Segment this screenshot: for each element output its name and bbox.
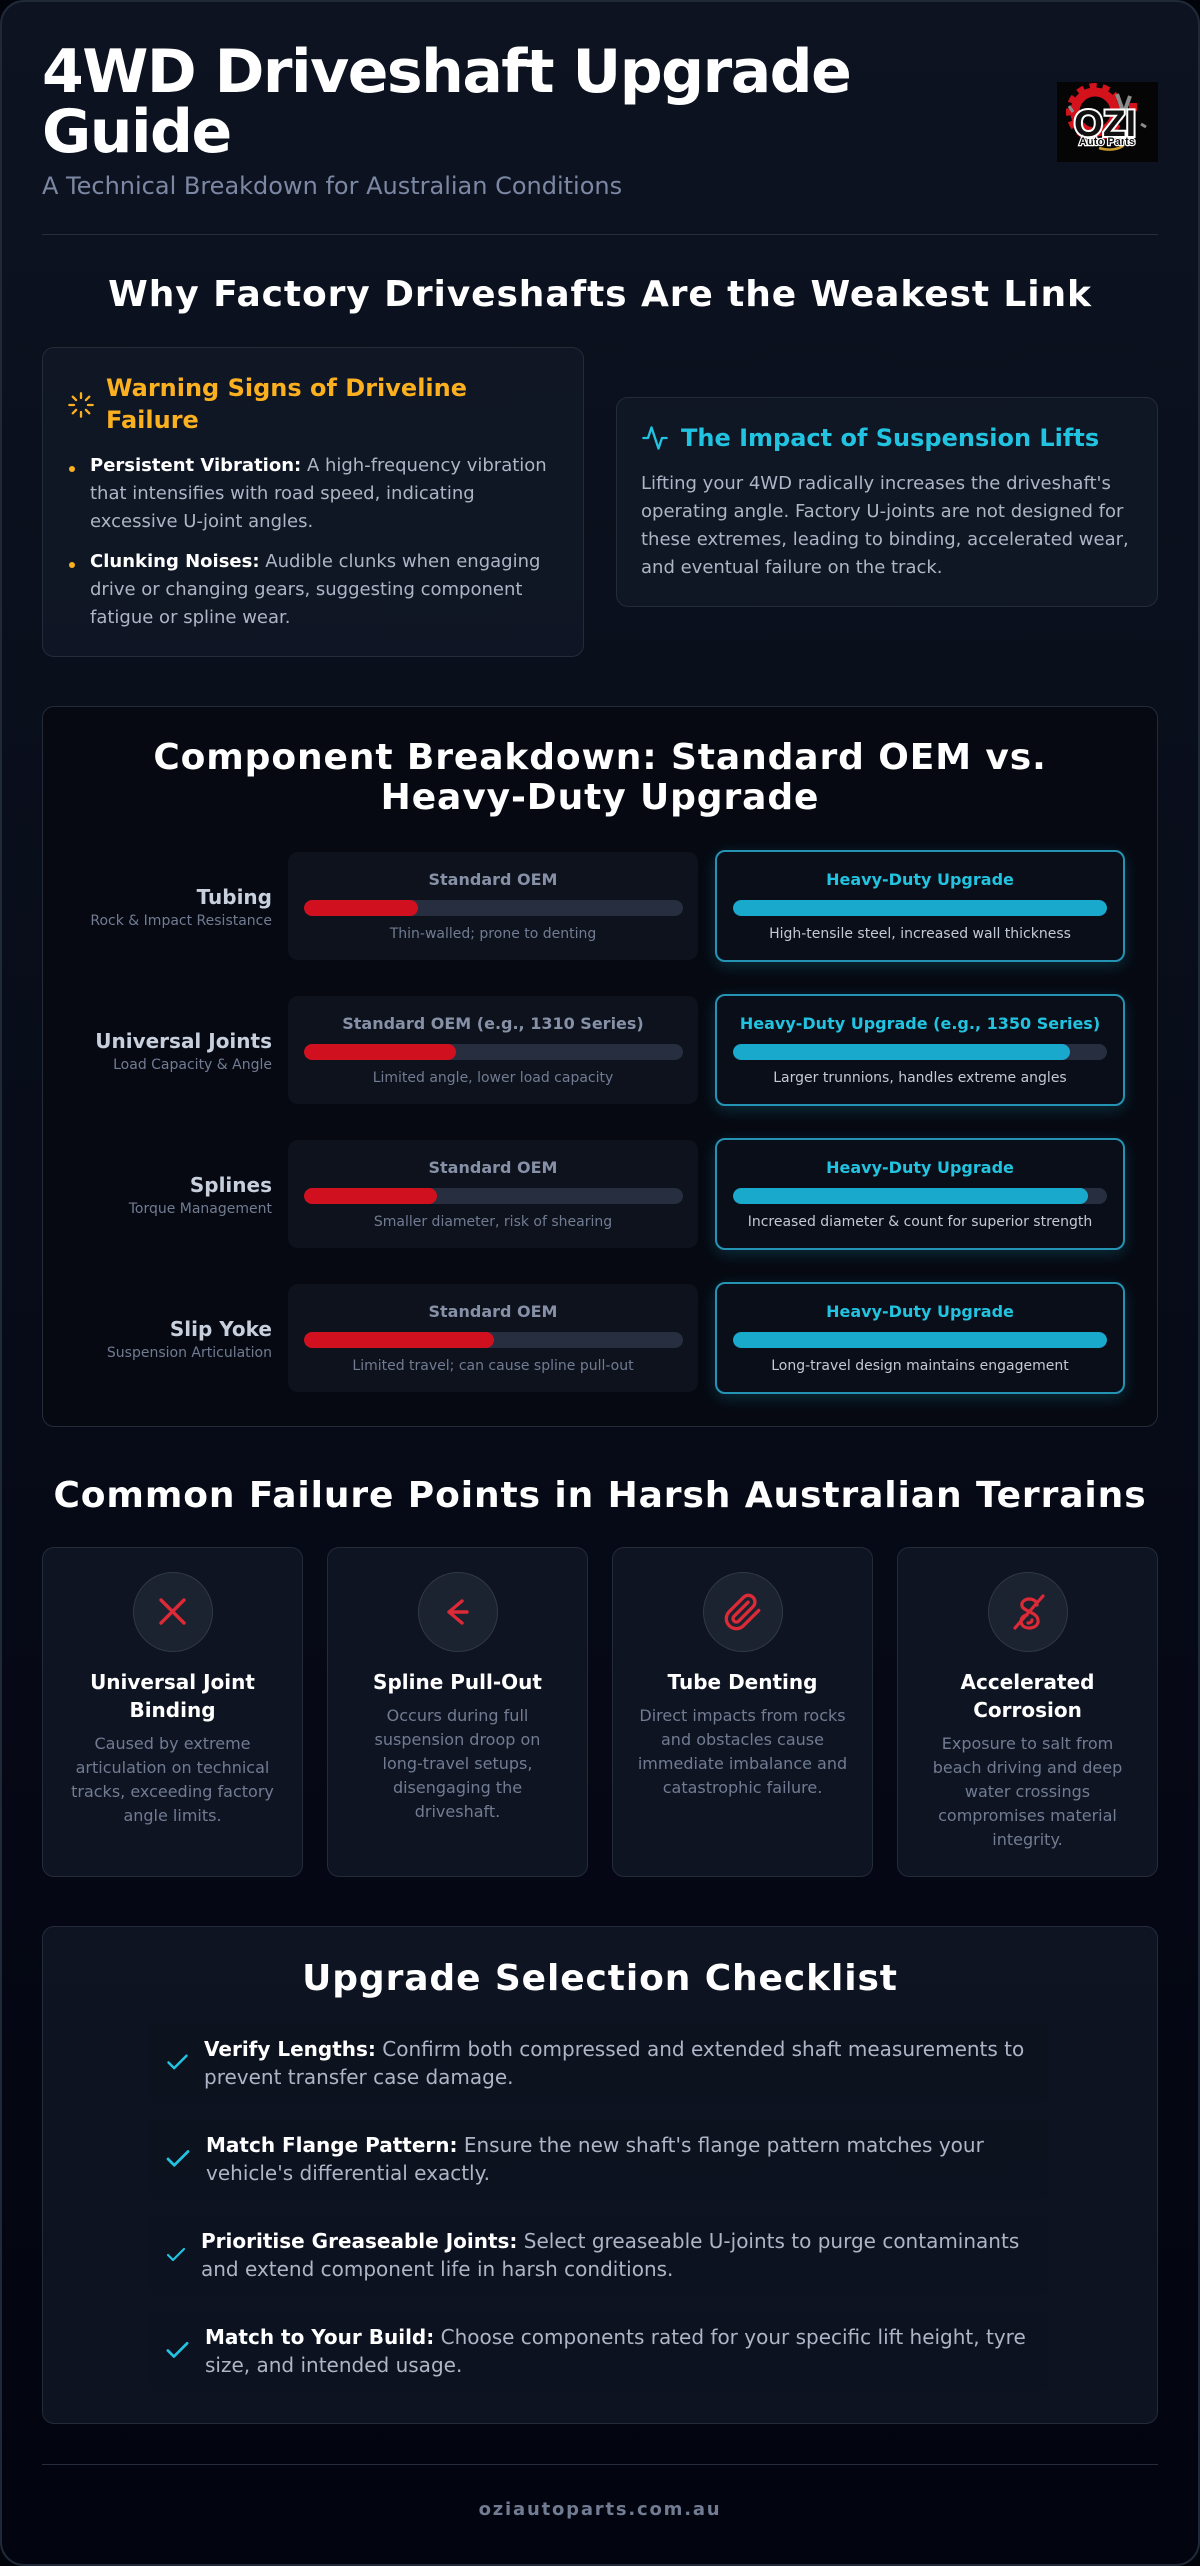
item text xyxy=(201,2229,1019,2281)
panel: suspension lifts xyxy=(616,397,1158,607)
warning heading xyxy=(106,374,467,434)
upgrade card: universal joints: Larger trunnions, handles extreme angles xyxy=(773,1070,1067,1086)
panel: tube denting xyxy=(612,1547,873,1877)
upgrade card: splines: Heavy-Duty Upgrade xyxy=(826,1158,1014,1177)
label: slip yoke: Slip Yoke xyxy=(170,1317,272,1341)
icon: x xyxy=(133,1572,213,1652)
title xyxy=(42,37,850,167)
upgrade card: universal joints xyxy=(715,994,1125,1106)
card text: Occurs during full xyxy=(387,1706,528,1725)
bullet dot one xyxy=(69,466,75,472)
warning item: vibration: Persistent Vibration: A high-frequency vibration xyxy=(90,455,547,476)
panel: spline pull-out xyxy=(327,1547,588,1877)
upgrade card: tubing xyxy=(715,850,1125,962)
item text: prevent transfer case damage. xyxy=(204,2065,514,2089)
card text: tracks, exceeding factory xyxy=(71,1782,274,1801)
label: tubing: Tubing xyxy=(197,885,272,909)
label: universal joints: Universal Joints xyxy=(95,1029,272,1053)
icon: activity pulse xyxy=(642,426,668,450)
heading: component breakdown: Heavy-Duty Upgrade xyxy=(381,777,819,818)
card text xyxy=(375,1706,540,1821)
card title: Spline Pull-Out xyxy=(373,1670,542,1694)
item text xyxy=(205,2325,1026,2377)
card text: catastrophic failure. xyxy=(663,1778,822,1797)
icon: check xyxy=(166,2342,189,2358)
item text: vehicle's differential exactly. xyxy=(206,2161,490,2185)
card text: Caused by extreme xyxy=(94,1734,251,1753)
card text: angle limits. xyxy=(123,1806,222,1825)
logo: Ozi Auto Parts: Auto Parts xyxy=(1079,136,1135,148)
logo: Ozi Auto Parts xyxy=(1057,82,1158,162)
upgrade card: universal joints: Heavy-Duty Upgrade (e.g., 1350 Series) xyxy=(740,1014,1100,1033)
icon: broken link xyxy=(988,1572,1068,1652)
card text: beach driving and deep xyxy=(933,1758,1122,1777)
card title xyxy=(960,1670,1094,1722)
footer: website: oziautoparts.com.au xyxy=(479,2499,721,2520)
item text xyxy=(204,2037,1024,2089)
heading: checklist: Upgrade Selection Checklist xyxy=(302,1958,898,1999)
logo: Ozi Auto Parts: OZI xyxy=(1074,103,1136,144)
icon: warning loader xyxy=(68,392,94,418)
title: 4WD Driveshaft Upgrade xyxy=(42,37,850,107)
sublabel: splines: Torque Management xyxy=(129,1201,272,1217)
upgrade card: splines: Increased diameter & count for superior strength xyxy=(748,1214,1092,1230)
checklist item: flange pattern xyxy=(149,2119,1049,2199)
label: splines: Splines xyxy=(190,1173,272,1197)
warning item: vibration: that intensifies with road speed, indicating xyxy=(90,483,475,504)
divider xyxy=(42,234,1158,235)
item text: Verify Lengths: Confirm both compressed and extended shaft measurements to xyxy=(204,2037,1024,2061)
standard card: universal joints xyxy=(288,996,698,1104)
warning item: clunking: fatigue or spline wear. xyxy=(90,607,290,628)
panel: universal joint binding xyxy=(42,1547,303,1877)
card title: Accelerated xyxy=(960,1670,1094,1694)
upgrade card: slip yoke xyxy=(715,1282,1125,1394)
warning item: clunking xyxy=(90,551,540,628)
sublabel: tubing: Rock & Impact Resistance xyxy=(90,913,272,929)
card text: driveshaft. xyxy=(415,1802,500,1821)
card text: articulation on technical xyxy=(76,1758,269,1777)
sublabel: slip yoke: Suspension Articulation xyxy=(107,1345,272,1361)
row: universal joints xyxy=(95,992,1131,1116)
standard card: splines: Smaller diameter, risk of shearing xyxy=(374,1214,612,1230)
item text: Match Flange Pattern: Ensure the new shaft's flange pattern matches your xyxy=(206,2133,984,2157)
checklist item: verify lengths xyxy=(149,2023,1049,2103)
warning item: clunking: Clunking Noises: Audible clunks when engaging xyxy=(90,551,540,572)
checklist item: match build xyxy=(149,2311,1049,2391)
item text: and extend component life in harsh conditions. xyxy=(201,2257,673,2281)
suspension text xyxy=(641,473,1129,578)
subtitle: A Technical Breakdown for Australian Conditions xyxy=(42,172,622,200)
card text xyxy=(71,1734,274,1825)
card title: Tube Denting xyxy=(668,1670,817,1694)
warning item: vibration: excessive U-joint angles. xyxy=(90,511,313,532)
upgrade card: splines xyxy=(715,1138,1125,1250)
warning item: vibration xyxy=(90,455,547,532)
card text: long-travel setups, xyxy=(382,1754,532,1773)
suspension heading: The Impact of Suspension Lifts xyxy=(681,424,1099,452)
card text: and obstacles cause xyxy=(661,1730,824,1749)
card title: Universal Joint xyxy=(90,1670,255,1694)
card text: Direct impacts from rocks xyxy=(639,1706,846,1725)
upgrade card: tubing: Heavy-Duty Upgrade xyxy=(826,870,1014,889)
suspension text: and eventual failure on the track. xyxy=(641,557,943,578)
warning item: clunking: drive or changing gears, suggesting component xyxy=(90,579,522,600)
standard card: splines xyxy=(288,1140,698,1248)
card title xyxy=(90,1670,255,1722)
upgrade card: slip yoke: Long-travel design maintains engagement xyxy=(771,1358,1069,1374)
heading: component breakdown xyxy=(153,737,1047,818)
bullet dot two xyxy=(69,562,75,568)
standard card: universal joints: Limited angle, lower load capacity xyxy=(373,1070,613,1086)
card text: immediate imbalance and xyxy=(638,1754,847,1773)
heading: component breakdown: Component Breakdown: Standard OEM vs. xyxy=(153,737,1047,778)
icon: arrow left xyxy=(418,1572,498,1652)
standard card: tubing xyxy=(288,852,698,960)
item text: size, and intended usage. xyxy=(205,2353,462,2377)
upgrade card: tubing: High-tensile steel, increased wall thickness xyxy=(769,926,1071,942)
warning heading: Warning Signs of Driveline xyxy=(106,374,467,402)
suspension text: operating angle. Factory U-joints are not designed for xyxy=(641,501,1123,522)
icon: check xyxy=(166,2248,186,2262)
standard card: slip yoke: Limited travel; can cause spline pull-out xyxy=(352,1358,634,1374)
row: tubing xyxy=(90,848,1131,972)
standard card: slip yoke: Standard OEM xyxy=(428,1302,557,1321)
panel: warning signs xyxy=(42,347,584,657)
suspension text: Lifting your 4WD radically increases the driveshaft's xyxy=(641,473,1111,494)
warning heading: Failure xyxy=(106,406,199,434)
card title: Binding xyxy=(129,1698,216,1722)
item text xyxy=(206,2133,984,2185)
row: splines xyxy=(128,1136,1131,1260)
card text: Exposure to salt from xyxy=(942,1734,1113,1753)
title: Guide xyxy=(42,97,231,167)
standard card: tubing: Standard OEM xyxy=(428,870,557,889)
sublabel: universal joints: Load Capacity & Angle xyxy=(113,1057,272,1073)
panel: accelerated corrosion xyxy=(897,1547,1158,1877)
standard card: tubing: Thin-walled; prone to denting xyxy=(390,926,596,942)
card title: Corrosion xyxy=(973,1698,1082,1722)
upgrade card: slip yoke: Heavy-Duty Upgrade xyxy=(826,1302,1014,1321)
panel: component breakdown xyxy=(42,706,1158,1427)
row: slip yoke xyxy=(107,1280,1131,1404)
divider xyxy=(42,2464,1158,2465)
icon: check xyxy=(166,2150,190,2167)
checklist item: greaseable joints xyxy=(149,2215,1049,2295)
suspension text: these extremes, leading to binding, accelerated wear, xyxy=(641,529,1129,550)
card text: suspension droop on xyxy=(375,1730,540,1749)
icon: check xyxy=(167,2054,188,2070)
item text: Prioritise Greaseable Joints: Select greaseable U-joints to purge contaminants xyxy=(201,2229,1019,2253)
card text: compromises material xyxy=(938,1806,1117,1825)
heading: why factory driveshafts: Why Factory Driveshafts Are the Weakest Link xyxy=(108,274,1092,315)
panel: upgrade checklist xyxy=(42,1926,1158,2424)
icon: paperclip xyxy=(703,1572,783,1652)
heading: common failure points: Common Failure Points in Harsh Australian Terrains xyxy=(53,1475,1147,1516)
standard card: splines: Standard OEM xyxy=(428,1158,557,1177)
item text: Match to Your Build: Choose components rated for your specific lift height, tyre xyxy=(205,2325,1026,2349)
standard card: universal joints: Standard OEM (e.g., 1310 Series) xyxy=(342,1014,644,1033)
card text: water crossings xyxy=(965,1782,1090,1801)
card text: integrity. xyxy=(992,1830,1063,1849)
card text xyxy=(933,1734,1122,1849)
card text xyxy=(638,1706,847,1797)
card text: disengaging the xyxy=(393,1778,522,1797)
standard card: slip yoke xyxy=(288,1284,698,1392)
